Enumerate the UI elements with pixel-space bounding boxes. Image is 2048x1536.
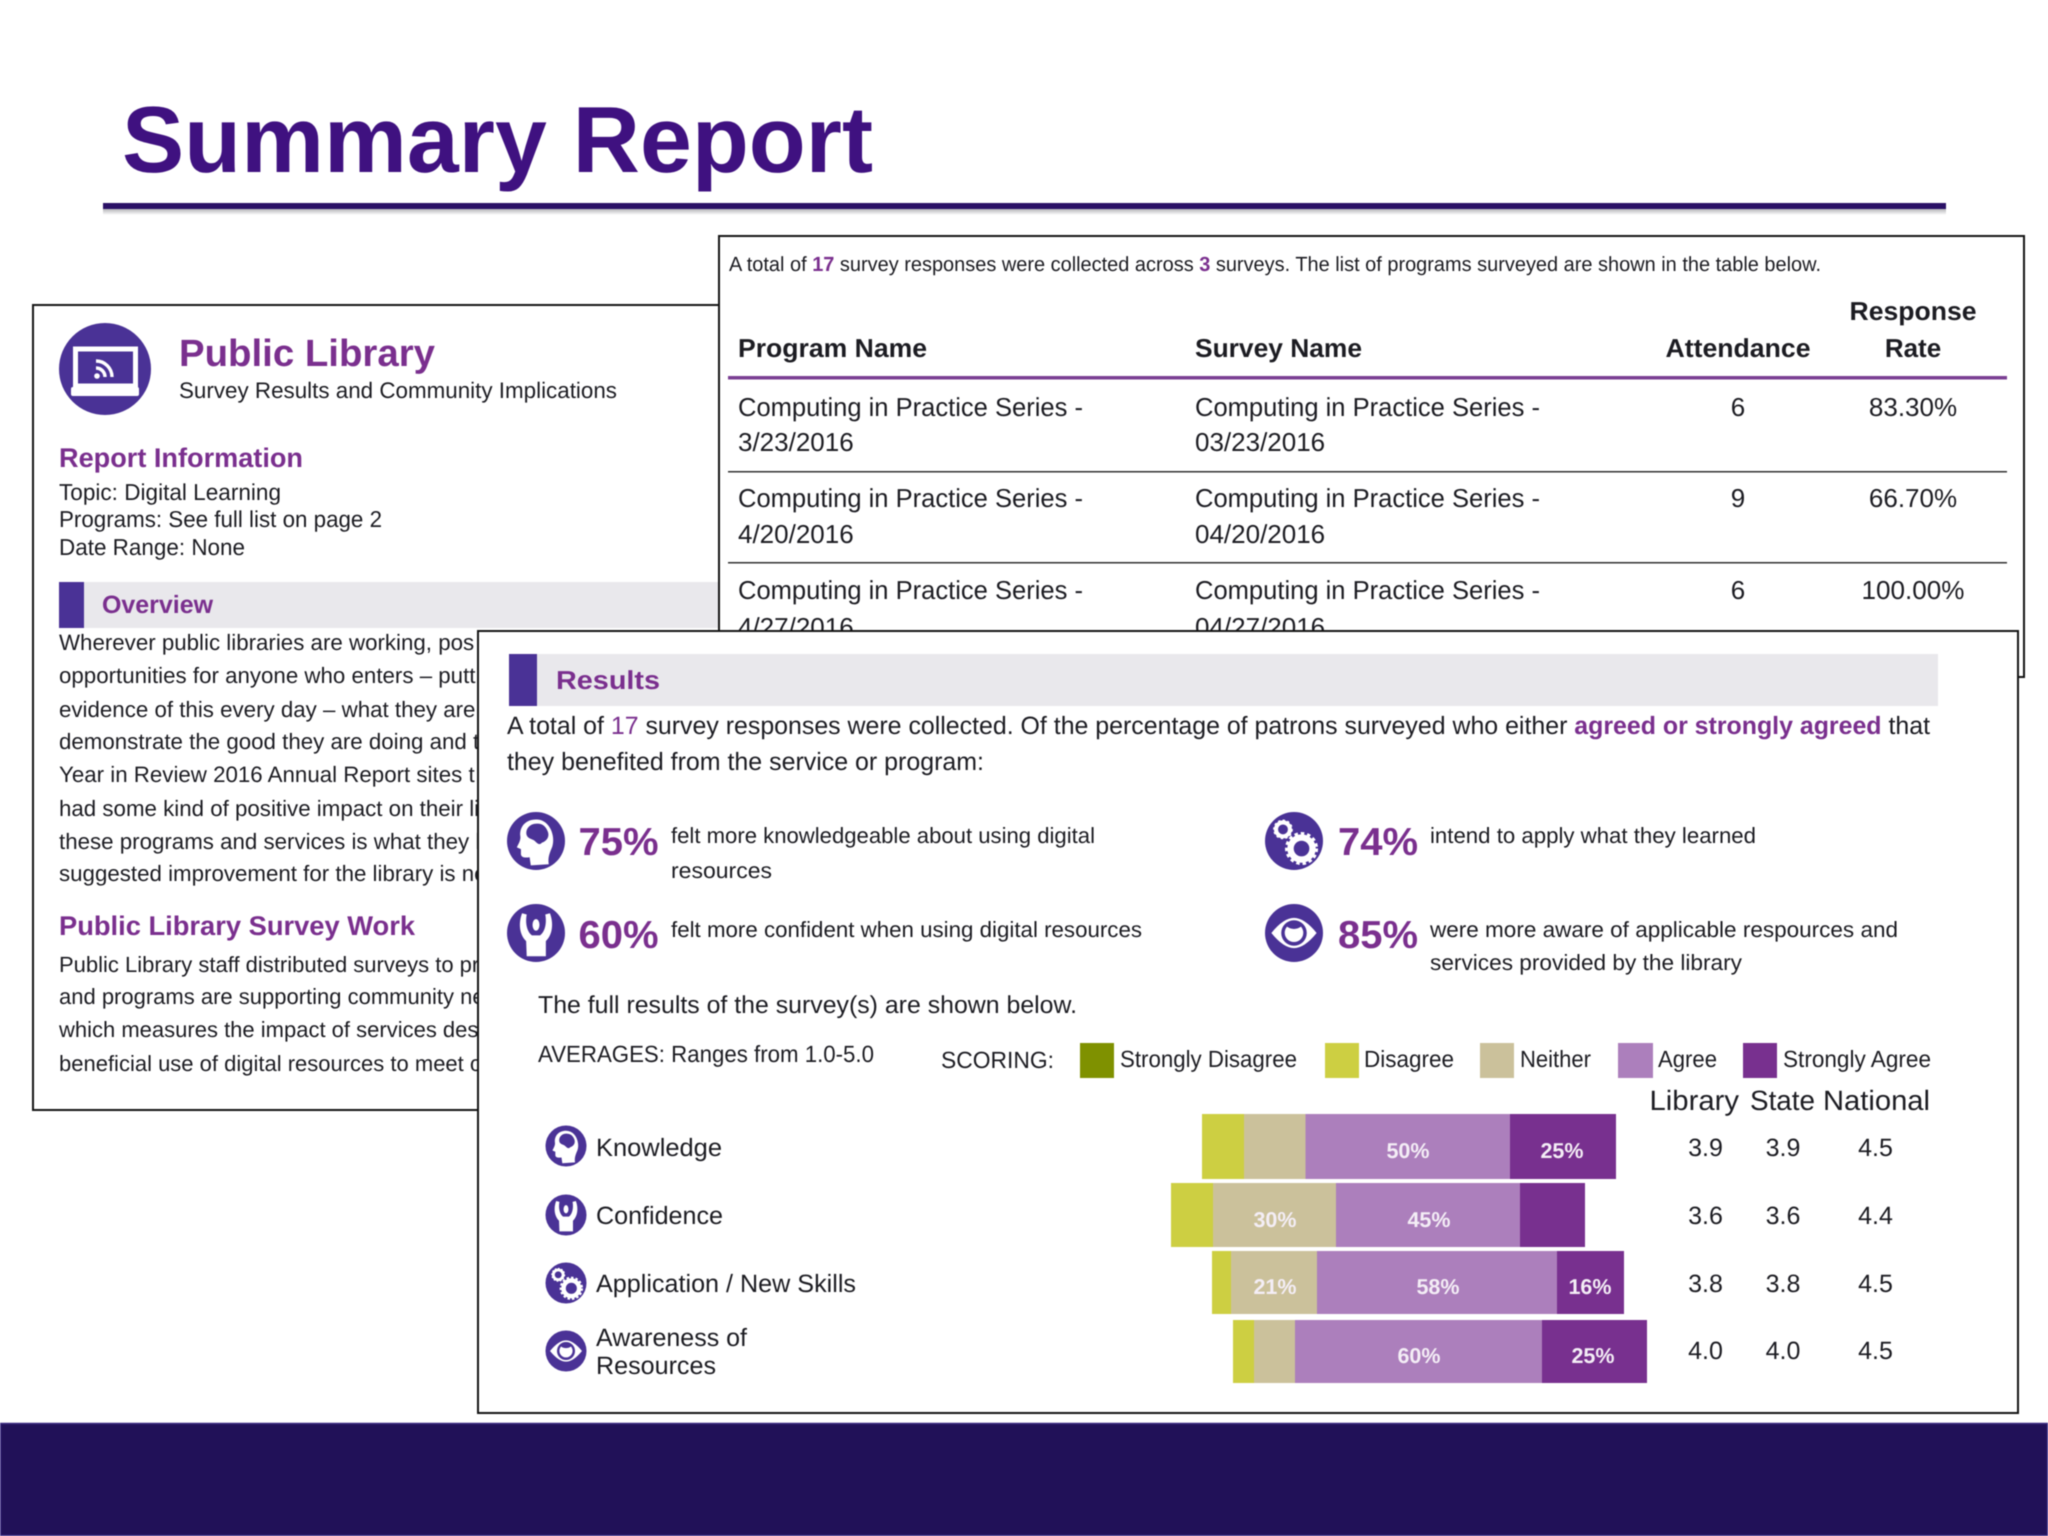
stat: 85% awareness: 85% [1338, 914, 1418, 957]
overview text [59, 630, 487, 886]
results heading bar [509, 654, 1938, 706]
averages column headers: State [1750, 1085, 1815, 1116]
table row 3: Computing in Practice Series - [738, 575, 1083, 605]
stat: 60% confidence [507, 904, 1142, 962]
averages: application: 3.8 [1688, 1270, 1723, 1298]
report details: Programs: See full list on page 2 [59, 506, 382, 532]
stacked bar: awareness: 25% [1571, 1344, 1615, 1368]
stacked bar: knowledge: 25% [1540, 1139, 1584, 1163]
stacked bar: application [1212, 1251, 1624, 1314]
heading: report information: Report Information [59, 443, 303, 473]
averages: knowledge: 3.9 [1688, 1134, 1723, 1162]
stat: 60% confidence: felt more confident when using digital resources [671, 917, 1142, 942]
table header: Attendance [1666, 333, 1810, 363]
averages: knowledge: 3.9 [1766, 1134, 1800, 1162]
stacked bar: knowledge [1202, 1114, 1616, 1179]
icon: laptop with signal [59, 323, 151, 415]
averages: confidence: 3.6 [1766, 1202, 1800, 1230]
overview text: Wherever public libraries are working, pos [59, 630, 474, 655]
table row 2: 4/20/2016 [738, 519, 854, 549]
stat: 74% application: 74% [1338, 821, 1418, 864]
survey work text: which measures the impact of services desi [58, 1017, 483, 1042]
stacked bar: application: 21% [1253, 1275, 1297, 1299]
stacked bar: knowledge: 50% [1386, 1139, 1430, 1163]
row: awareness: Awareness of [596, 1324, 747, 1352]
averages: confidence [1688, 1202, 1893, 1230]
table row 1: 6 [1731, 392, 1745, 422]
table row 3 [738, 575, 1964, 642]
stat: 85% awareness: services provided by the library [1430, 950, 1742, 975]
row: awareness: Resources [596, 1352, 716, 1380]
overview text: these programs and services is what they l [59, 829, 480, 854]
stat: 74% application [1265, 812, 1756, 870]
full results sentence: The full results of the survey(s) are shown below. [538, 992, 1077, 1019]
results intro text: A total of 17 survey responses were collected. Of the percentage of patrons surveyed who either agreed or strongly agreed that [507, 712, 1930, 740]
stacked bar: confidence [1171, 1183, 1585, 1247]
stacked bar: application: 58% [1416, 1275, 1460, 1299]
table row 2: 9 [1731, 483, 1745, 513]
table row 3: 100.00% [1862, 575, 1964, 605]
icon: gears small [546, 1262, 586, 1304]
stat: 75% knowledge: felt more knowledgeable about using digital [671, 823, 1095, 848]
stacked bar: awareness: 60% [1397, 1344, 1441, 1368]
overview text: Year in Review 2016 Annual Report sites t [59, 762, 475, 787]
table header: Rate [1885, 333, 1941, 363]
table row 2: Computing in Practice Series - [738, 483, 1083, 513]
averages column headers [1650, 1085, 1930, 1116]
icon: eye [1265, 904, 1323, 962]
stat: 75% knowledge: resources [671, 858, 772, 883]
averages: application: 3.8 [1766, 1270, 1800, 1298]
table row 1 [738, 392, 1957, 457]
panel: public library report page [33, 305, 733, 1110]
table row 3: Computing in Practice Series - [1195, 575, 1540, 605]
panel: results page [478, 631, 2018, 1413]
icon: head small [546, 1126, 586, 1166]
scoring legend: SCORING: [941, 1047, 1054, 1073]
report details: Topic: Digital Learning [59, 479, 281, 505]
stacked bar: confidence: 30% [1253, 1208, 1297, 1232]
averages: confidence: 4.4 [1858, 1202, 1893, 1230]
averages: awareness [1688, 1337, 1893, 1365]
scoring legend: Strongly Agree [1783, 1046, 1931, 1072]
table header [738, 296, 1976, 363]
report details: Date Range: None [59, 534, 245, 560]
results intro text [507, 712, 1930, 776]
stat: 85% awareness [1265, 904, 1898, 975]
results intro text: they benefited from the service or program: [507, 748, 984, 776]
row: application [546, 1251, 1893, 1314]
table row 1: 83.30% [1869, 392, 1957, 422]
table row 3: 04/27/2016 [1195, 612, 1325, 642]
title: Summary Report [122, 87, 873, 192]
row: knowledge: Knowledge [596, 1134, 722, 1162]
averages column headers: Library [1650, 1085, 1739, 1116]
icon: raised hands [507, 904, 565, 962]
icon: eye small [546, 1330, 586, 1372]
table row 1: 03/23/2016 [1195, 427, 1325, 457]
averages: awareness: 4.0 [1688, 1337, 1723, 1365]
survey work text: beneficial use of digital resources to meet c [59, 1051, 481, 1076]
table row 2: 04/20/2016 [1195, 519, 1325, 549]
row: application: Application / New Skills [596, 1270, 856, 1298]
icon: head [507, 812, 565, 870]
averages: application [1688, 1270, 1893, 1298]
panel: programs surveyed table [719, 236, 2024, 677]
overview text: opportunities for anyone who enters – putti [59, 663, 480, 688]
table header: Program Name [738, 333, 927, 363]
table row 1: 3/23/2016 [738, 427, 854, 457]
scoring legend: Neither [1520, 1046, 1591, 1072]
table row 3: 6 [1731, 575, 1745, 605]
averages: knowledge [1688, 1134, 1893, 1162]
averages: knowledge: 4.5 [1858, 1134, 1893, 1162]
scoring legend: Disagree [1364, 1046, 1454, 1072]
stat: 75% knowledge [507, 812, 1095, 883]
results heading bar: Results [556, 665, 660, 695]
overview text: evidence of this every day – what they are [59, 697, 475, 722]
survey work text: Public Library staff distributed surveys to pro [59, 952, 491, 977]
overview text: demonstrate the good they are doing and t [59, 729, 480, 754]
averages: application: 4.5 [1858, 1270, 1893, 1298]
stat: 74% application: intend to apply what they learned [1430, 823, 1756, 848]
averages note: AVERAGES: Ranges from 1.0-5.0 [538, 1041, 874, 1067]
row: awareness [546, 1320, 1893, 1383]
survey work text [58, 952, 491, 1076]
table row 3: 4/27/2016 [738, 612, 854, 642]
row: knowledge [546, 1114, 1893, 1179]
stat: 60% confidence: 60% [578, 914, 658, 957]
stacked bar: awareness [1233, 1320, 1647, 1383]
scoring legend: Agree [1658, 1046, 1717, 1072]
table header: Response [1850, 296, 1976, 326]
scoring legend: Strongly Disagree [1120, 1046, 1297, 1072]
title rule [103, 203, 1946, 215]
averages column headers: National [1823, 1085, 1930, 1116]
table row 2: Computing in Practice Series - [1195, 483, 1540, 513]
survey work text: and programs are supporting community ne [59, 984, 485, 1009]
averages: confidence: 3.6 [1688, 1202, 1723, 1230]
footer band [0, 1424, 2048, 1536]
overview text: had some kind of positive impact on their li [59, 796, 479, 821]
overview heading bar: Overview [102, 591, 214, 619]
overview heading bar [59, 582, 720, 628]
table row 1: Computing in Practice Series - [738, 392, 1083, 422]
row: confidence: Confidence [596, 1202, 723, 1230]
stacked bar: application: 16% [1568, 1275, 1612, 1299]
averages: awareness: 4.0 [1766, 1337, 1800, 1365]
icon: gears [1265, 812, 1323, 870]
averages: awareness: 4.5 [1858, 1337, 1893, 1365]
heading: Public Library: Public Library [179, 333, 435, 375]
subtitle: Survey Results and Community Implications [179, 378, 617, 403]
overview text: suggested improvement for the library is ne [59, 861, 487, 886]
heading: public library survey work: Public Library Survey Work [59, 911, 416, 941]
table intro text: A total of 17 survey responses were collected across 3 surveys. The list of programs surveyed are shown in the table below. [729, 253, 1821, 276]
stat: 85% awareness: were more aware of applicable respources and [1429, 917, 1898, 942]
report details [59, 479, 382, 560]
row: confidence [546, 1183, 1893, 1247]
stat: 75% knowledge: 75% [578, 821, 658, 864]
icon: hands small [546, 1194, 586, 1236]
table row 1: Computing in Practice Series - [1195, 392, 1540, 422]
table row 2: 66.70% [1869, 483, 1957, 513]
table row 2 [738, 483, 1957, 549]
stacked bar: confidence: 45% [1407, 1208, 1451, 1232]
scoring legend [941, 1043, 1931, 1078]
table header: Survey Name [1195, 333, 1362, 363]
